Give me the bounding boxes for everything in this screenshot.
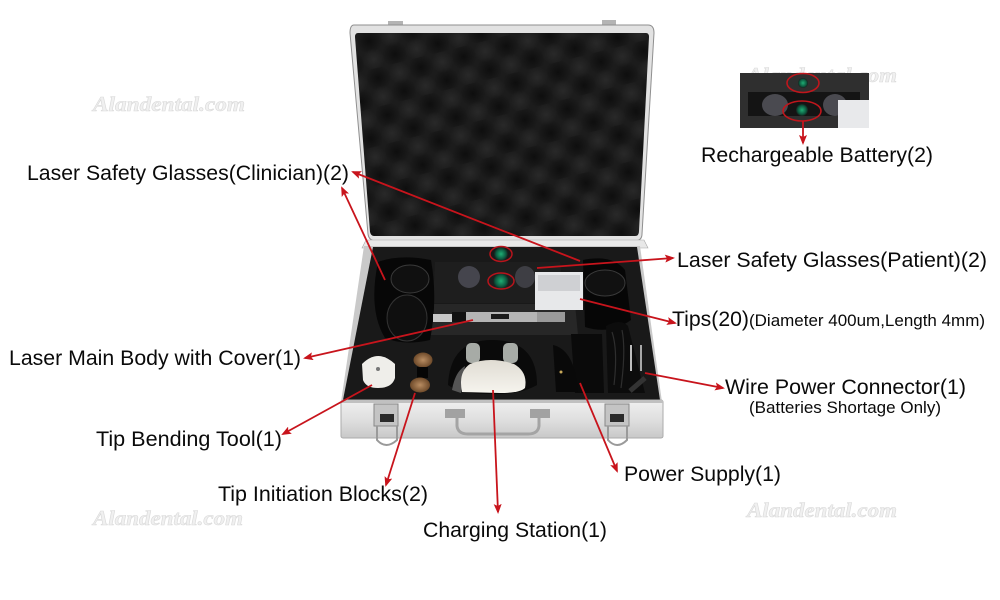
label: wire power connector: Wire Power Connector(1): [725, 375, 966, 399]
label: tip bending tool: Tip Bending Tool(1): [96, 427, 282, 451]
case base: [341, 246, 663, 438]
label: tip initiation blocks: Tip Initiation Blocks(2): [218, 482, 428, 506]
label: laser main body: Laser Main Body with Cover(1): [9, 346, 301, 370]
label: tips: Tips(20): [672, 307, 749, 331]
inset photo: rechargeable battery: [740, 73, 869, 128]
tip bending tool: [362, 356, 395, 388]
clinician glasses: [374, 257, 434, 343]
watermarks: [91, 63, 897, 530]
laser main body: [433, 312, 565, 322]
label: rechargeable battery: Rechargeable Battery(2): [701, 143, 933, 167]
patient glasses: [458, 258, 631, 330]
label: tips: (Diameter 400um,Length 4mm): [749, 312, 985, 330]
charging station: [448, 340, 537, 394]
case lid: [350, 20, 654, 241]
wire power connector: [606, 322, 645, 393]
label: tips: [672, 307, 985, 331]
watermarks: Alandental.com: [91, 506, 243, 530]
case latches and handle: [374, 404, 629, 445]
power supply: [553, 334, 604, 393]
tips box: [535, 272, 583, 310]
laser body recess: [424, 304, 578, 335]
patient glasses bay: [433, 262, 565, 303]
open case: [341, 20, 663, 445]
label: wire power connector: (Batteries Shortage Only): [749, 399, 941, 417]
watermarks: Alandental.com: [745, 63, 897, 87]
arrows: [283, 121, 803, 512]
label: wire power connector: [725, 375, 966, 417]
label: power supply: Power Supply(1): [624, 462, 781, 486]
tip initiation blocks: [410, 352, 432, 392]
watermarks: Alandental.com: [745, 498, 897, 522]
label: charging station: Charging Station(1): [423, 518, 607, 542]
label: patient glasses: Laser Safety Glasses(Patient)(2): [677, 248, 987, 272]
case hinge strip: [362, 240, 648, 248]
batteries in case: [488, 246, 514, 289]
label: clinician glasses: Laser Safety Glasses(Clinician)(2): [27, 161, 349, 185]
watermarks: Alandental.com: [91, 92, 245, 116]
